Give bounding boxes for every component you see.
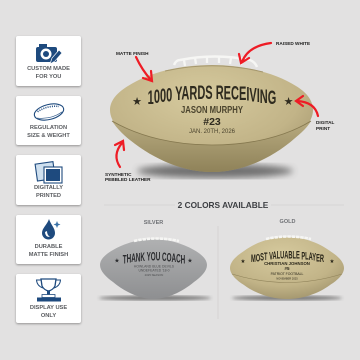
column divider <box>217 226 219 319</box>
callout labels: DIGITAL <box>316 120 335 125</box>
ball inscription: JAN. 20TH, 2026 <box>189 129 236 135</box>
label: CUSTOM MADE <box>27 66 70 72</box>
label: DURABLE <box>35 244 62 250</box>
gold football: #5 <box>284 266 290 271</box>
icon: trophy <box>36 278 61 302</box>
icon: water drop <box>42 219 60 240</box>
callout labels: RAISED WHITE <box>276 41 310 46</box>
red arrows <box>115 43 318 167</box>
silver football: 2025 SEASON <box>145 273 163 277</box>
shadow <box>137 164 293 178</box>
silver label: SILVER <box>144 220 163 226</box>
icon: camera and pencil <box>36 44 62 64</box>
ball inscription: 1000 YARDS RECEIVING <box>148 83 276 109</box>
gold laces <box>266 236 311 239</box>
gold label: GOLD <box>280 219 295 225</box>
gold football: CHRISTIAN JOHNSON <box>264 261 310 266</box>
ball inscription: #23 <box>203 116 221 128</box>
main football <box>110 56 313 178</box>
silver football: HOWLAND BLUE DEVILS <box>134 264 175 268</box>
label: DIGITALLY <box>34 185 63 191</box>
callout labels: MATTE FINISH <box>116 51 149 56</box>
silver football <box>99 238 211 300</box>
gold football: NOVEMBER 2025 <box>276 276 298 280</box>
silver football: ★ <box>114 258 120 264</box>
ball inscription <box>132 83 294 135</box>
label: SIZE & WEIGHT <box>27 133 70 139</box>
panel: regulation size and weight <box>16 96 81 145</box>
panel: digitally printed <box>16 155 81 205</box>
label: DISPLAY USE <box>30 305 67 311</box>
callout labels: PRINT <box>316 126 330 131</box>
laces <box>174 56 257 67</box>
label: ONLY <box>41 313 56 319</box>
ball inscription: JASON MURPHY <box>181 104 243 116</box>
label <box>27 125 70 139</box>
panel: durable matte finish <box>16 215 81 264</box>
label <box>29 244 68 258</box>
label <box>30 305 67 319</box>
panel: custom made for you <box>16 36 81 86</box>
gold football: ★ <box>330 258 335 265</box>
callout labels <box>105 41 335 182</box>
label: PRINTED <box>36 193 61 199</box>
icon: printed photos <box>34 161 63 184</box>
gold football: ★ <box>241 258 246 265</box>
label: MATTE FINISH <box>29 252 68 258</box>
silver football: UNDEFEATED '18-0 <box>138 268 170 272</box>
label <box>34 185 63 199</box>
lace seam <box>165 66 263 72</box>
gold football: PATRIOT FOOTBALL <box>271 272 304 276</box>
gold football: MOST VALUABLE PLAYER <box>251 248 324 265</box>
ball body <box>110 65 313 172</box>
icon: football outline <box>34 103 64 121</box>
callout labels: SYNTHETIC <box>105 172 132 177</box>
silver laces <box>134 238 179 241</box>
label: FOR YOU <box>36 74 61 80</box>
lower panel <box>112 121 311 172</box>
section heading: 2 COLORS AVAILABLE <box>178 200 269 210</box>
gold football <box>230 236 344 300</box>
silver football: ★ <box>187 258 193 264</box>
ball inscription: ★ <box>132 96 142 108</box>
ball inscription: ★ <box>284 96 294 108</box>
callout labels: PEBBLED LEATHER <box>105 177 151 182</box>
panel: display use only <box>16 274 81 323</box>
silver football: THANK YOU COACH <box>123 251 185 266</box>
label: REGULATION <box>30 125 67 131</box>
label <box>27 66 70 80</box>
